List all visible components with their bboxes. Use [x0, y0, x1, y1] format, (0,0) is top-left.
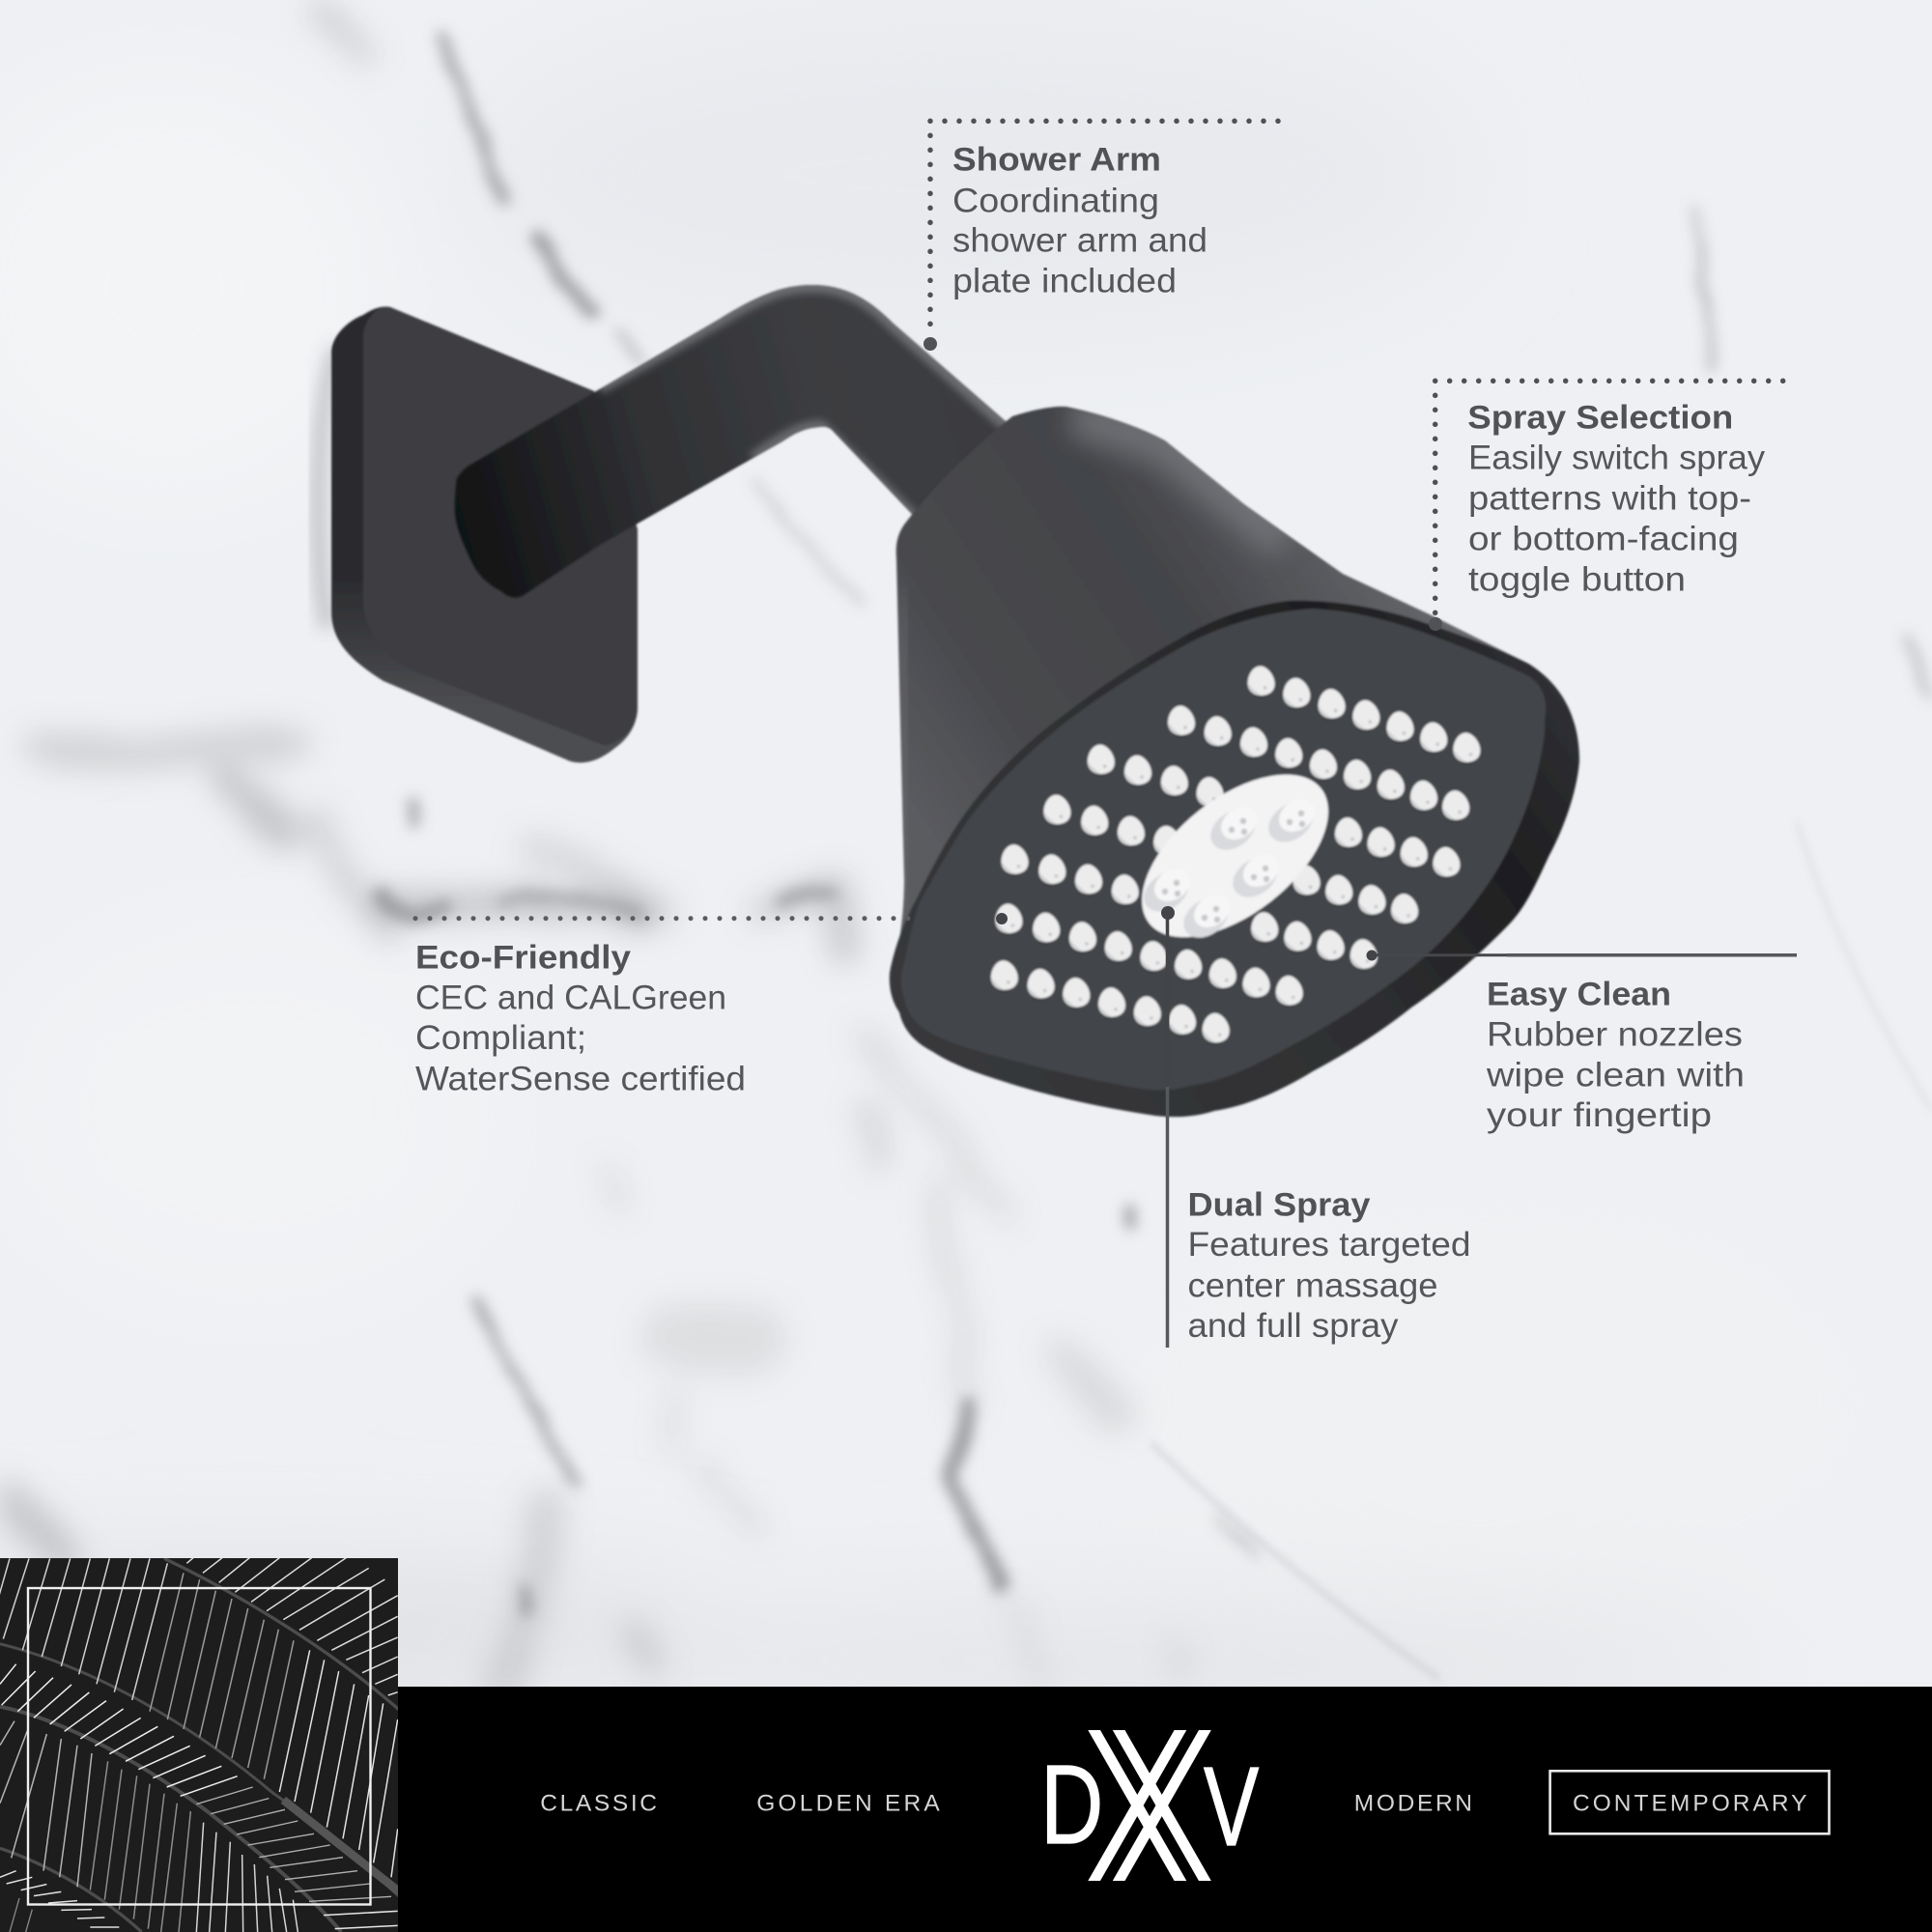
description — [415, 979, 746, 1097]
nav: Modern: MODERN — [1354, 1790, 1472, 1816]
shower arm pipe — [455, 285, 1043, 597]
logo X mark — [1088, 1730, 1211, 1881]
description: Features targeted — [1188, 1226, 1470, 1264]
description: WaterSense certified — [415, 1060, 746, 1097]
nav: Classic: CLASSIC — [540, 1790, 657, 1816]
dark marble vein cores — [382, 36, 1932, 1611]
structural ribs — [0, 1558, 399, 1932]
callout: Easy Clean — [1366, 951, 1797, 1134]
center massage spray — [1114, 743, 1357, 969]
category navigation — [540, 1771, 1829, 1833]
description — [1486, 1016, 1745, 1134]
nav: Contemporary, selected — [1550, 1771, 1830, 1833]
description: Coordinating — [952, 182, 1159, 219]
callout: Shower Arm — [923, 121, 1281, 351]
description: shower arm and — [952, 222, 1208, 260]
shower head — [890, 407, 1579, 1117]
outer spray nozzles — [990, 667, 1480, 1045]
upper right slats — [186, 1558, 398, 1695]
nav: Contemporary, selected: CONTEMPORARY — [1573, 1790, 1806, 1816]
leader line — [1161, 906, 1175, 1348]
dotted leader — [923, 121, 1281, 351]
callout: Spray Selection — [1429, 381, 1785, 631]
dotted leader — [415, 916, 916, 921]
long upper slats — [0, 1558, 167, 1700]
bottom black band — [398, 1687, 1932, 1932]
small marker dot on nozzle — [996, 913, 1008, 924]
description: Easily switch spray — [1468, 439, 1766, 476]
lower slats — [0, 1721, 92, 1887]
description: and full spray — [1188, 1307, 1399, 1345]
dotted leader — [1429, 381, 1785, 631]
heading: Spray Selection — [1467, 399, 1733, 436]
heading: Eco-Friendly — [415, 939, 631, 976]
description: center massage — [1188, 1266, 1437, 1304]
architectural photo square — [0, 1558, 399, 1932]
description: or bottom-facing — [1468, 520, 1739, 557]
description: wipe clean with — [1486, 1056, 1745, 1094]
leader line — [1366, 951, 1797, 960]
description — [952, 182, 1208, 300]
callout: Dual Spray — [1161, 906, 1470, 1348]
face plate — [901, 609, 1546, 1090]
face rim — [890, 601, 1579, 1117]
head body — [892, 407, 1578, 1063]
description — [1188, 1226, 1470, 1345]
callout: Eco-Friendly — [415, 919, 916, 1097]
description — [1468, 439, 1766, 599]
description: your fingertip — [1487, 1096, 1712, 1134]
white inset frame — [28, 1588, 371, 1905]
description: toggle button — [1468, 561, 1686, 599]
middle short slats — [0, 1664, 238, 1796]
heading: Easy Clean — [1487, 977, 1671, 1013]
description: Compliant; — [415, 1019, 586, 1057]
heading: Shower Arm — [952, 142, 1161, 179]
description: plate included — [952, 263, 1177, 300]
DXV logo — [1040, 1730, 1259, 1881]
nav: Golden Era: GOLDEN ERA — [756, 1790, 940, 1816]
thin marble arcs — [1151, 821, 1932, 1679]
soft marble veins — [0, 13, 1183, 1681]
DXV logo: D — [1040, 1743, 1103, 1868]
description: CEC and CALGreen — [415, 979, 726, 1016]
description: Rubber nozzles — [1487, 1016, 1743, 1054]
heading: Dual Spray — [1188, 1186, 1371, 1223]
DXV logo: V — [1204, 1744, 1259, 1869]
description: patterns with top- — [1468, 479, 1751, 517]
shower arm wall plate — [319, 306, 638, 762]
